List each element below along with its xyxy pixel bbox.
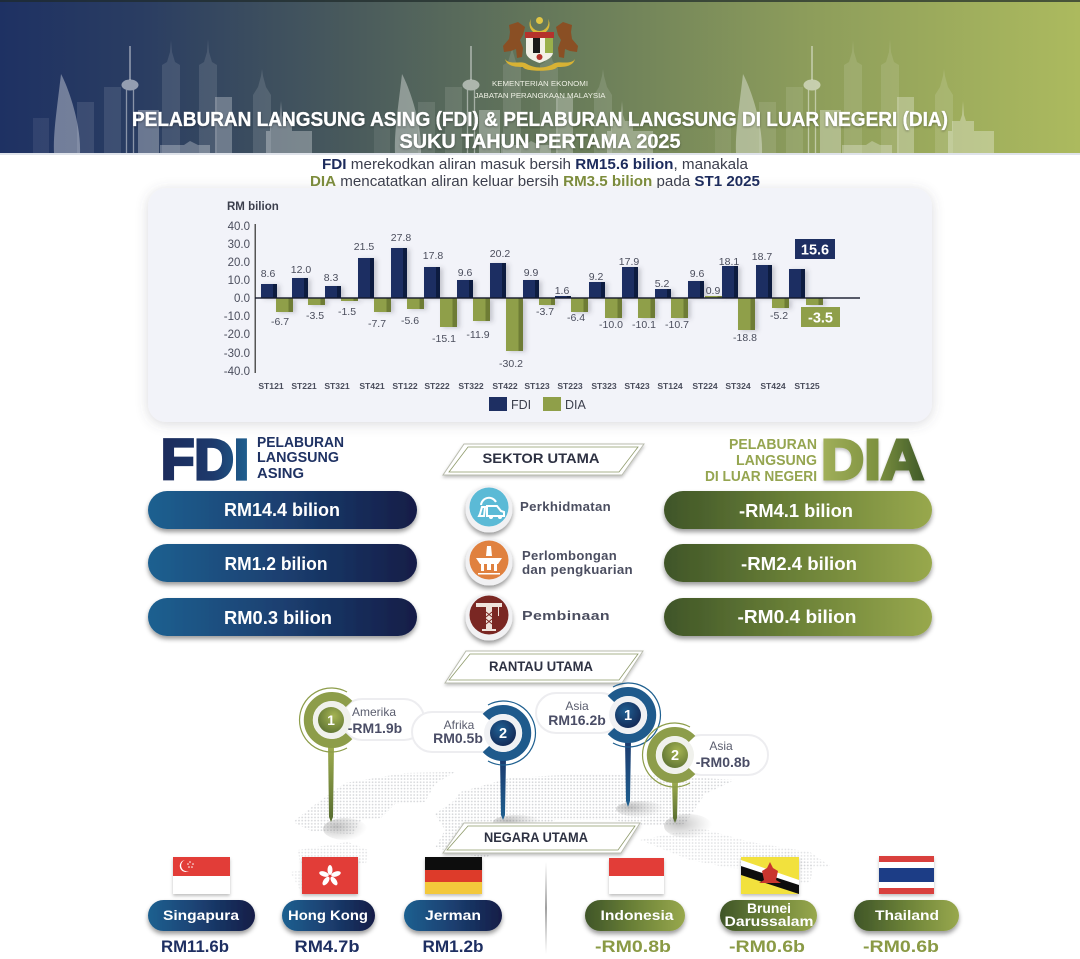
icon: national crest — [503, 17, 578, 71]
quarter labels: ST322 — [458, 381, 484, 391]
pin: Afrika: RM0.5b — [433, 730, 483, 746]
heading: DIA: LANGSUNG — [736, 453, 817, 469]
FDI value labels: 17.8 — [423, 250, 443, 262]
FDI value labels: 1.6 — [555, 285, 569, 297]
callout: DIA -3.5 — [801, 307, 840, 327]
FDI value labels: 12.0 — [291, 264, 311, 276]
quarter labels: ST122 — [392, 381, 418, 391]
quarter labels: ST121 — [258, 381, 284, 391]
FDI value labels: 5.2 — [655, 278, 669, 290]
FDI value labels: 9.2 — [589, 271, 603, 283]
country values: -RM0.6b — [863, 937, 939, 956]
quarter labels: ST423 — [624, 381, 650, 391]
quarter labels: ST221 — [291, 381, 317, 391]
pin: Asia DIA: 2 — [671, 748, 679, 764]
title — [132, 109, 948, 153]
heading: FDI: PELABURAN — [257, 435, 344, 451]
FDI value labels: 18.7 — [752, 251, 772, 263]
FDI value labels: 9.9 — [524, 267, 538, 279]
pin: Afrika — [412, 701, 541, 829]
pill: DIA mining: -RM2.4 bilion — [741, 553, 857, 574]
pill: Hong Kong: Hong Kong — [288, 908, 368, 923]
country values — [161, 937, 939, 956]
heading: DIA — [705, 428, 924, 492]
banner: rantau utama: RANTAU UTAMA — [489, 659, 593, 674]
FDI value labels: 8.3 — [324, 272, 338, 284]
quarter labels: ST321 — [324, 381, 350, 391]
pill: Singapura: Singapura — [163, 908, 240, 923]
DIA value labels: -7.7 — [368, 318, 386, 330]
pin: Amerika: Amerika — [352, 705, 396, 719]
FDI value labels: 9.6 — [690, 268, 704, 280]
pill: Brunei Darussalam — [720, 900, 817, 931]
quarter labels: ST421 — [359, 381, 385, 391]
FDI value labels: 21.5 — [354, 241, 374, 253]
ministry name — [474, 79, 606, 100]
icon: services — [466, 486, 512, 532]
flag: Brunei — [741, 857, 799, 894]
DIA sector values — [664, 491, 932, 636]
pill: FDI construction: RM0.3 bilion — [224, 607, 332, 628]
header band — [0, 0, 1080, 153]
country values: -RM0.6b — [729, 937, 805, 956]
y axis: -30.0 — [224, 348, 250, 360]
country values: RM1.2b — [422, 937, 484, 956]
flag: Indonesia — [609, 858, 664, 894]
pin: Asia DIA — [643, 723, 768, 838]
panel: bar chart — [148, 188, 932, 422]
FDI value labels: 20.2 — [490, 248, 510, 260]
FDI value labels: 18.1 — [719, 256, 739, 268]
DIA value labels: -10.1 — [632, 319, 656, 331]
label: construction: Pembinaan — [522, 608, 610, 623]
ministry name: JABATAN PERANGKAAN MALAYSIA — [474, 91, 606, 100]
title: PELABURAN LANGSUNG ASING (FDI) & PELABURAN LANGSUNG DI LUAR NEGERI (DIA) — [132, 109, 948, 131]
pill: DIA construction: -RM0.4 bilion — [738, 606, 856, 627]
pin: Amerika: -RM1.9b — [348, 720, 402, 736]
FDI value labels: 17.9 — [619, 256, 639, 268]
y axis: 40.0 — [228, 221, 250, 233]
FDI value labels: 9.6 — [458, 267, 472, 279]
separator — [545, 862, 547, 954]
DIA value labels: -30.2 — [499, 358, 523, 370]
label: mining: dan pengkuarian — [522, 562, 633, 577]
flag: Thailand — [879, 856, 934, 894]
pill: DIA services — [664, 491, 932, 529]
legend — [489, 397, 586, 412]
callout: DIA -3.5: -3.5 — [808, 310, 833, 326]
heading: FDI — [161, 428, 344, 492]
heading: DIA: PELABURAN — [729, 437, 817, 453]
pin: Asia FDI — [536, 683, 664, 817]
pin: Amerika: 1 — [327, 712, 335, 728]
y axis: -20.0 — [224, 329, 250, 341]
quarter labels: ST223 — [557, 381, 583, 391]
pin: Asia FDI: Asia — [565, 699, 589, 713]
pin: Asia DIA: Asia — [709, 739, 733, 753]
banner: sektor utama: SEKTOR UTAMA — [482, 451, 600, 466]
quarter labels: ST123 — [524, 381, 550, 391]
pill: DIA services: -RM4.1 bilion — [739, 500, 853, 521]
banner: negara utama — [443, 823, 640, 853]
country values: RM11.6b — [161, 937, 229, 956]
pill: Brunei Darussalam: Darussalam — [724, 914, 814, 929]
pill: DIA mining — [664, 544, 932, 582]
pill: Brunei Darussalam: Brunei — [747, 901, 791, 916]
country values: RM4.7b — [294, 937, 360, 956]
title: SUKU TAHUN PERTAMA 2025 — [400, 131, 680, 153]
DIA value labels: -6.4 — [567, 312, 585, 324]
DIA value labels: -10.7 — [665, 319, 689, 331]
legend: DIA — [565, 398, 586, 412]
pill: Jerman — [404, 900, 502, 931]
DIA value labels: 0.9 — [706, 285, 720, 297]
pill: FDI services: RM14.4 bilion — [224, 499, 340, 520]
y axis: 10.0 — [228, 275, 250, 287]
FDI sector values — [148, 491, 417, 636]
y axis: -10.0 — [224, 311, 250, 323]
pill: Singapura — [148, 900, 255, 931]
DIA value labels: -10.0 — [599, 319, 623, 331]
quarter labels: ST124 — [657, 381, 683, 391]
pill: Indonesia — [585, 900, 685, 931]
icon: construction — [466, 594, 512, 640]
DIA value labels — [271, 285, 788, 370]
DIA value labels: -6.7 — [271, 316, 289, 328]
pill: FDI construction — [148, 598, 417, 636]
ministry name: KEMENTERIAN EKONOMI — [492, 79, 588, 88]
DIA value labels: -18.8 — [733, 332, 757, 344]
quarter labels: ST424 — [760, 381, 786, 391]
flag: Singapore — [173, 857, 230, 894]
pin: Asia DIA: -RM0.8b — [696, 754, 750, 770]
pill: FDI mining — [148, 544, 417, 582]
banner: rantau utama — [445, 651, 643, 683]
DIA bars — [276, 296, 823, 351]
flag: Germany — [425, 857, 482, 894]
DIA value labels: -15.1 — [432, 333, 456, 345]
FDI value labels — [261, 232, 772, 297]
heading: FDI: FDI — [161, 428, 249, 492]
quarter labels: ST323 — [591, 381, 617, 391]
pill: Thailand: Thailand — [875, 908, 939, 923]
dotted world map — [290, 772, 830, 894]
subtitle: DIA mencatatkan aliran keluar bersih RM3.5 bilion pada ST1 2025 — [310, 174, 760, 190]
banner: sektor utama — [443, 444, 644, 475]
y axis — [224, 221, 256, 378]
banner: negara utama: NEGARA UTAMA — [484, 830, 588, 845]
pin: Afrika: Afrika — [444, 718, 475, 732]
icon: mining — [466, 538, 512, 586]
pill: Thailand — [854, 900, 959, 931]
pill: FDI mining: RM1.2 bilion — [224, 553, 328, 574]
pin: Asia FDI: RM16.2b — [548, 712, 606, 728]
DIA value labels: -3.5 — [306, 310, 324, 322]
quarter labels: ST222 — [424, 381, 450, 391]
flag: Hong Kong — [302, 857, 358, 894]
FDI value labels: 8.6 — [261, 268, 275, 280]
quarter labels: ST125 — [794, 381, 820, 391]
country values: -RM0.8b — [595, 937, 671, 956]
FDI bars — [261, 248, 805, 298]
quarter labels: ST324 — [725, 381, 751, 391]
callout: FDI 15.6 — [795, 239, 835, 259]
DIA value labels: -5.2 — [770, 310, 788, 322]
y axis: 20.0 — [228, 257, 250, 269]
pill: Indonesia: Indonesia — [600, 908, 674, 923]
DIA value labels: -1.5 — [338, 306, 356, 318]
subtitle — [310, 157, 760, 190]
pill: Hong Kong — [282, 900, 375, 931]
quarter labels: ST422 — [492, 381, 518, 391]
chart unit label: RM bilion — [227, 201, 279, 213]
pin: Amerika — [300, 688, 424, 840]
heading: FDI: LANGSUNG — [257, 450, 339, 466]
skyline illustration — [33, 39, 994, 153]
legend: FDI — [511, 398, 531, 412]
callout: FDI 15.6: 15.6 — [801, 242, 829, 258]
heading: DIA: DIA — [821, 428, 924, 492]
pill: Jerman: Jerman — [425, 908, 481, 923]
DIA value labels: -5.6 — [401, 315, 419, 327]
label: mining: Perlombongan — [522, 548, 617, 563]
label: mining — [522, 548, 633, 577]
y axis: 0.0 — [234, 293, 250, 305]
y axis: 30.0 — [228, 239, 250, 251]
FDI value labels: 27.8 — [391, 232, 411, 244]
heading: DIA: DI LUAR NEGERI — [705, 469, 817, 485]
quarter labels — [258, 381, 820, 391]
subtitle: FDI merekodkan aliran masuk bersih RM15.6 bilion , manakala — [322, 157, 749, 173]
quarter labels: ST224 — [692, 381, 718, 391]
heading: FDI: ASING — [257, 466, 304, 482]
label: services: Perkhidmatan — [520, 499, 611, 514]
pin: Asia FDI: 1 — [624, 708, 632, 724]
pill: DIA construction — [664, 598, 932, 636]
DIA value labels: -11.9 — [466, 329, 490, 341]
pin: Afrika: 2 — [499, 726, 507, 742]
y axis: -40.0 — [224, 366, 250, 378]
DIA value labels: -3.7 — [536, 306, 554, 318]
pill: FDI services — [148, 491, 417, 529]
